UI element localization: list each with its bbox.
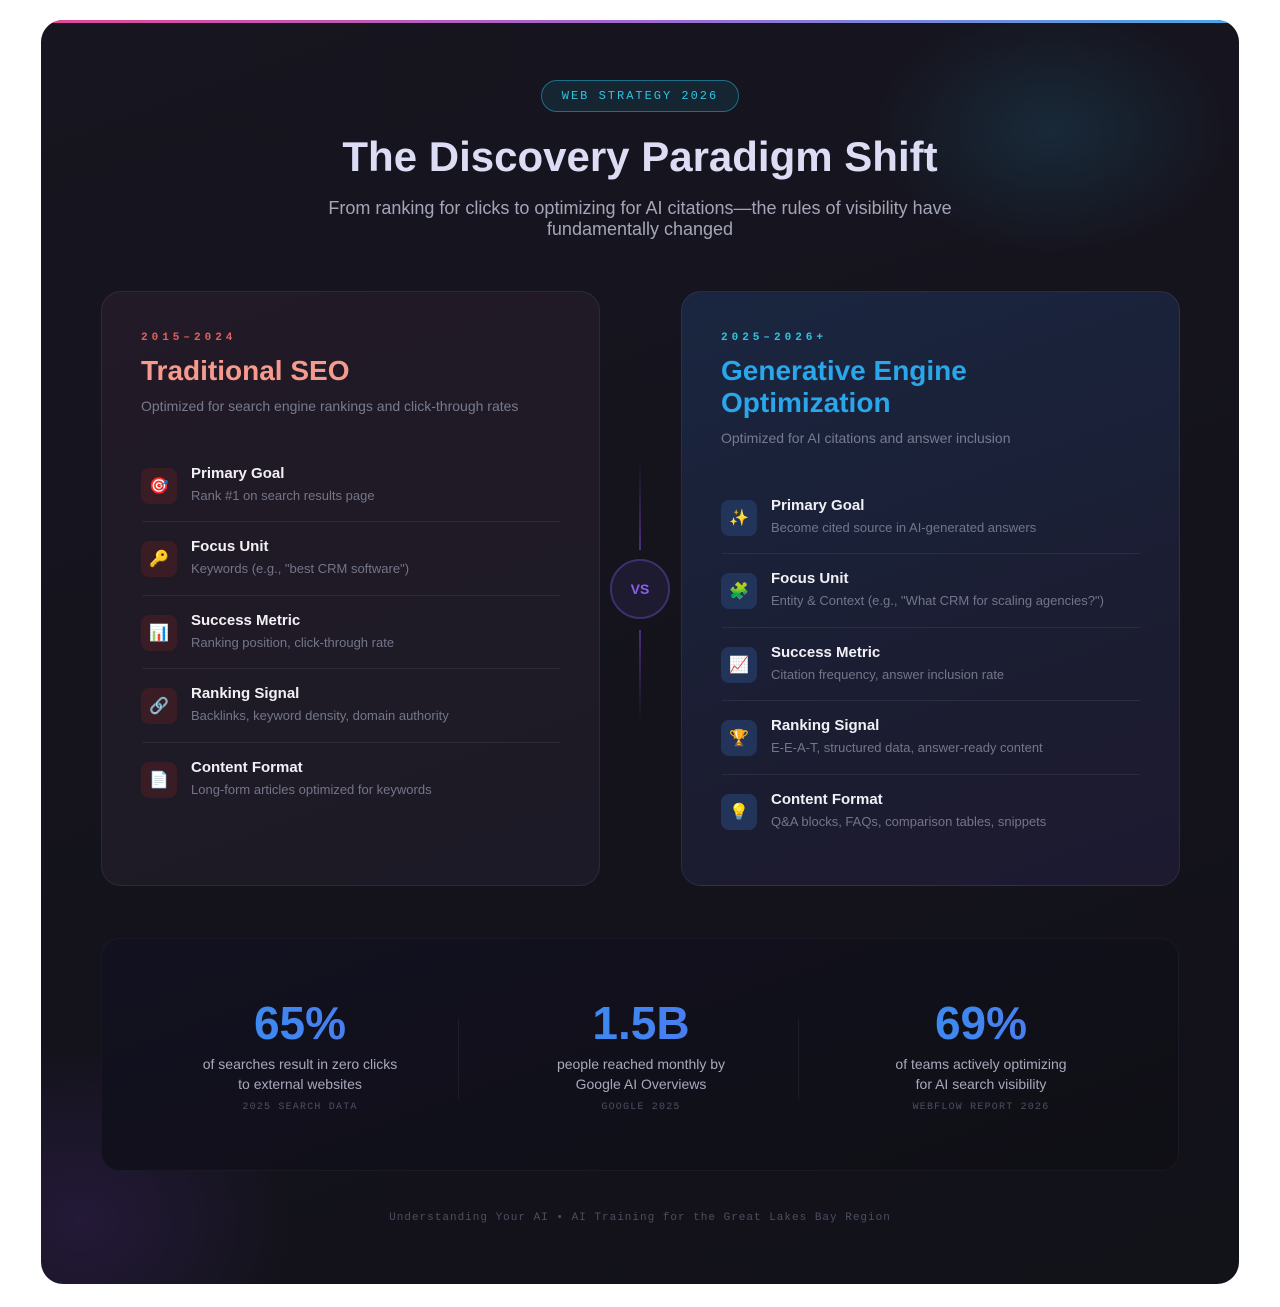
item: success metric (141, 612, 394, 651)
stat: 1.5B (557, 997, 725, 1113)
item: success metric: 📈 (729, 657, 749, 674)
title: The Discovery Paradigm Shift (342, 133, 938, 180)
item: focus unit (721, 570, 1104, 609)
badge: WEB STRATEGY 2026 (562, 89, 718, 103)
item: ranking signal: 🏆 (729, 730, 749, 747)
stats panel (101, 938, 1179, 1171)
panel: GEO: Optimization (721, 387, 891, 418)
item: success metric (721, 644, 1004, 683)
stat: 65% (203, 997, 397, 1113)
item: focus unit: 🔑 (149, 551, 169, 568)
item: primary goal: ✨ (729, 510, 749, 527)
item: ranking signal: Backlinks, keyword density, domain authority (191, 708, 449, 723)
item: primary goal: Primary Goal (771, 497, 864, 514)
footer: Understanding Your AI • AI Training for the Great Lakes Bay Region (389, 1212, 891, 1224)
stat: 1.5B: people reached monthly by (557, 1056, 725, 1072)
item: ranking signal: Ranking Signal (771, 717, 879, 734)
item: content format: Long-form articles optimized for keywords (191, 782, 432, 797)
badge (541, 80, 739, 112)
vs connector: VS (631, 581, 649, 597)
item: primary goal: Rank #1 on search results page (191, 488, 375, 503)
item: content format: Content Format (191, 759, 303, 776)
stat: 69%: WEBFLOW REPORT 2026 (913, 1102, 1049, 1113)
subtitle: From ranking for clicks to optimizing for AI citations—the rules of visibility have fundamentally changed (328, 198, 952, 239)
item: content format: Content Format (771, 791, 883, 808)
item: ranking signal: E-E-A-T, structured data, answer-ready content (771, 740, 1043, 755)
stat: 1.5B: 1.5B (592, 997, 690, 1049)
item: success metric: Citation frequency, answer inclusion rate (771, 667, 1004, 682)
item: success metric: Ranking position, click-through rate (191, 635, 394, 650)
panel: traditional SEO: 2015–2024 (141, 332, 236, 344)
item: primary goal: Become cited source in AI-generated answers (771, 520, 1036, 535)
item: focus unit: Entity & Context (e.g., "What CRM for scaling agencies?") (771, 593, 1104, 608)
panel: GEO (681, 291, 1180, 886)
item: focus unit (141, 538, 409, 577)
panel: traditional SEO: Optimized for search engine rankings and click-through rates (141, 398, 518, 414)
stat: 69%: for AI search visibility (916, 1076, 1046, 1092)
item: success metric: Success Metric (771, 644, 880, 661)
item: primary goal: 🎯 (149, 478, 169, 495)
panel: GEO: Generative Engine (721, 355, 967, 386)
item: focus unit: Keywords (e.g., "best CRM software") (191, 561, 409, 576)
item: focus unit: 🧩 (729, 583, 749, 600)
item: primary goal (141, 465, 375, 504)
item: primary goal: Primary Goal (191, 465, 284, 482)
item: primary goal (721, 497, 1036, 536)
stat: 1.5B: GOOGLE 2025 (601, 1102, 681, 1113)
item: content format: 💡 (729, 804, 749, 821)
item: content format: 📄 (149, 772, 169, 789)
panel: GEO: Optimized for AI citations and answer inclusion (721, 430, 1010, 446)
item: ranking signal: 🔗 (149, 698, 169, 715)
stat: 65%: 65% (254, 997, 346, 1049)
item: ranking signal (721, 717, 1043, 756)
stat: 65%: 2025 SEARCH DATA (242, 1102, 358, 1113)
stat: 69% (895, 997, 1067, 1113)
item: content format (141, 759, 432, 798)
item: content format (721, 791, 1046, 830)
item: success metric: Success Metric (191, 612, 300, 629)
panel: traditional SEO: Traditional SEO (141, 355, 349, 386)
panel: traditional SEO (101, 291, 600, 886)
item: focus unit: Focus Unit (771, 570, 848, 587)
stat: 65%: of searches result in zero clicks (203, 1056, 397, 1072)
item: content format: Q&A blocks, FAQs, comparison tables, snippets (771, 814, 1046, 829)
item: success metric: 📊 (149, 625, 169, 642)
stat: 69%: of teams actively optimizing (895, 1056, 1067, 1072)
panel: GEO: 2025–2026+ (721, 332, 827, 344)
stat: 1.5B: Google AI Overviews (576, 1076, 706, 1092)
stat: 69%: 69% (935, 997, 1027, 1049)
item: ranking signal (141, 685, 449, 724)
item: ranking signal: Ranking Signal (191, 685, 299, 702)
item: focus unit: Focus Unit (191, 538, 268, 555)
stat: 65%: to external websites (238, 1076, 362, 1092)
